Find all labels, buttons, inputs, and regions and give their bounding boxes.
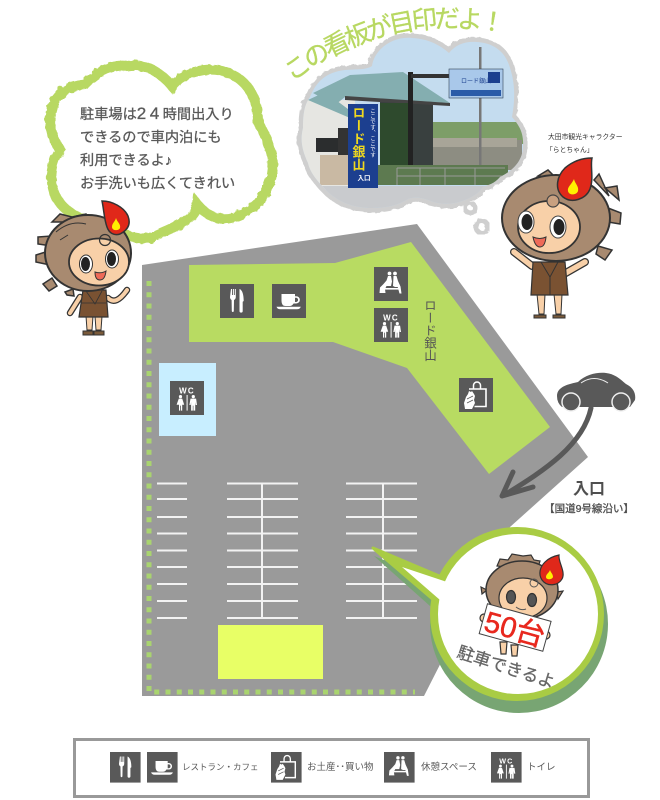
label: entrance: 入口	[573, 481, 605, 498]
legend icon: toilet	[491, 752, 522, 783]
heading: look for this sign	[292, 28, 540, 82]
sign: 50 cars: 50台	[481, 605, 549, 654]
photo of signboard: ロード銀山	[461, 77, 491, 85]
legend icon: cafe	[147, 752, 178, 783]
label: entrance: 【国道9号線沿い】	[544, 502, 634, 515]
dotted planting border	[149, 281, 415, 692]
legend	[74, 740, 588, 796]
legend icon: restaurant	[110, 752, 141, 783]
label: Road Ginzan: ロード銀山	[422, 299, 436, 362]
bus parking yellow area	[218, 625, 323, 679]
parking lot	[142, 224, 588, 696]
caption: character name: 大田市観光キャラクター	[548, 132, 623, 141]
callout: 50 cars	[373, 527, 608, 713]
thought cloud outline	[302, 38, 523, 208]
legend icon: shopping	[271, 752, 302, 783]
icon: restaurant	[220, 284, 254, 318]
icon: rest space	[374, 267, 408, 301]
photo of signboard: ロード銀山	[350, 106, 366, 171]
icon: toilet in blue area	[170, 381, 204, 415]
legend text: toilet: トイレ	[527, 762, 556, 773]
caption: character name: 「らとちゃん」	[546, 146, 594, 154]
speech bubble text	[80, 104, 235, 192]
legend icon: rest space	[384, 752, 415, 783]
speech bubble	[50, 65, 273, 238]
parking space lines	[157, 483, 417, 618]
thought bubbles	[465, 203, 488, 233]
blue restroom area	[159, 363, 216, 436]
icon: cafe	[272, 284, 306, 318]
speech bubble text: できるので車内泊にも	[80, 129, 222, 146]
legend text: restaurant and cafe: レストラン・カフェ	[182, 762, 259, 772]
label: entrance	[544, 481, 634, 515]
arrow: entrance route	[502, 408, 591, 496]
callout text: 駐車できるよ	[455, 643, 557, 692]
character: left	[36, 201, 131, 335]
heading text: この看板が目印だよ！	[286, 7, 496, 78]
legend text: shopping: お土産･･買い物	[307, 761, 374, 773]
photo of signboard: 入口	[358, 174, 370, 182]
character holding sign	[480, 554, 563, 656]
icon: car	[557, 373, 635, 411]
photo of signboard: ここです、ここです	[369, 108, 376, 158]
building area: road station	[189, 242, 550, 474]
speech bubble text: 利用できるよ♪	[80, 153, 172, 169]
caption: character name	[546, 132, 623, 154]
character: right	[502, 158, 621, 318]
photo of signboard	[302, 38, 524, 204]
icon: shopping	[459, 378, 493, 412]
icon: toilet	[374, 308, 408, 342]
speech bubble text: お手洗いも広くてきれい	[80, 176, 235, 192]
legend text: rest space: 休憩スペース	[421, 761, 477, 773]
speech bubble text: 駐車場は24時間出入り	[80, 104, 234, 123]
